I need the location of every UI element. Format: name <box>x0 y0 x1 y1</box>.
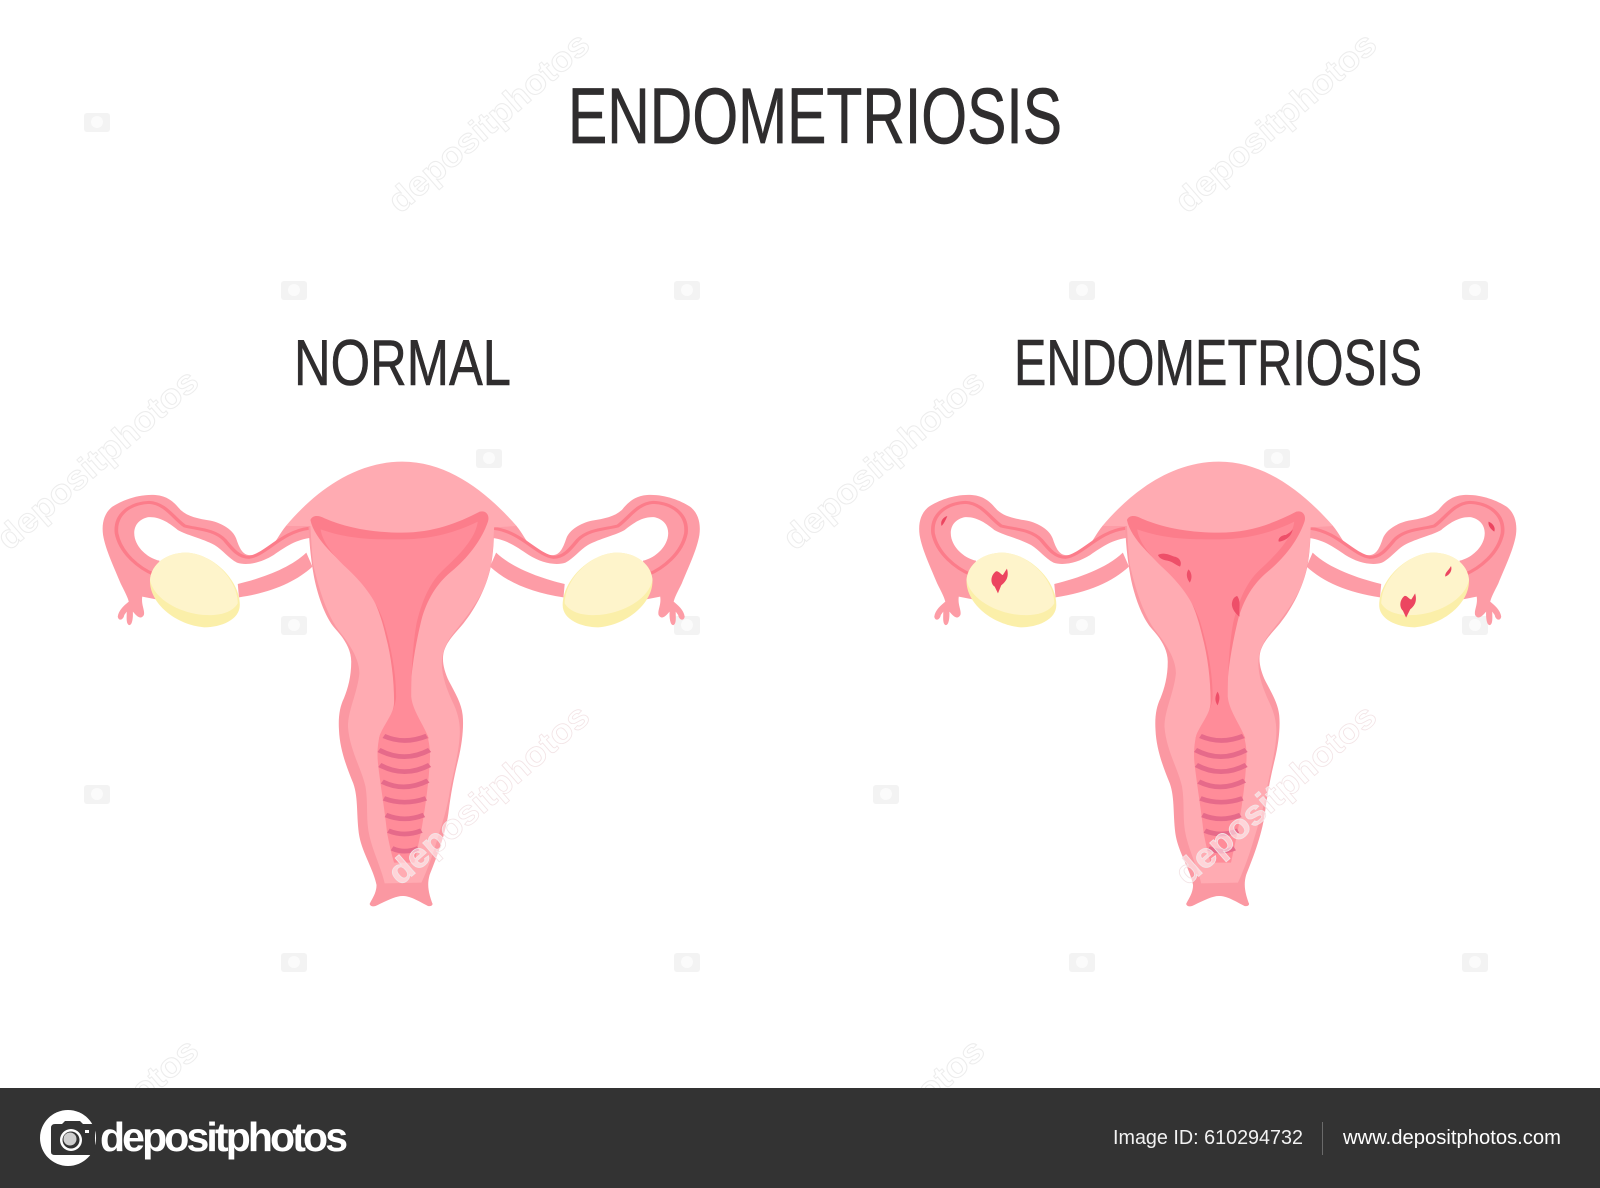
right fallopian tube <box>1307 495 1516 625</box>
watermark layer: over artwork: depositphotos <box>380 697 597 892</box>
right ovary <box>563 553 652 627</box>
left ovary <box>967 553 1056 627</box>
right ovary <box>1379 553 1469 627</box>
vaginal folds <box>379 736 430 851</box>
website url: www.depositphotos.com <box>1342 1127 1561 1149</box>
diagram: endometriosis uterus <box>919 462 1516 906</box>
left ovarian ligament <box>238 553 312 597</box>
heading: normal: NORMAL <box>294 326 511 399</box>
right ovarian ligament <box>1307 553 1381 597</box>
uterus body <box>286 462 517 906</box>
left ovarian ligament <box>1054 553 1129 597</box>
vaginal folds <box>1196 736 1246 851</box>
right fallopian tube <box>490 495 700 625</box>
watermark layer: over artwork <box>380 697 1384 892</box>
diagram: normal uterus <box>103 462 700 906</box>
icon: camera logo <box>40 1110 96 1166</box>
watermark layer: background: depositphotos <box>775 362 992 557</box>
right ovarian ligament <box>490 553 565 597</box>
title: ENDOMETRIOSIS <box>568 71 1062 160</box>
footer bar <box>0 1088 1600 1188</box>
watermark layer: background: depositphotos <box>1167 25 1384 220</box>
left fallopian tube <box>103 495 312 625</box>
heading: endometriosis: ENDOMETRIOSIS <box>1014 326 1422 399</box>
uterus body <box>1102 462 1333 906</box>
watermark layer: over artwork: depositphotos <box>1167 697 1384 892</box>
left ovary <box>150 553 240 627</box>
watermark layer: background: depositphotos <box>380 25 597 220</box>
logo wordmark: depositphotos <box>100 1114 348 1160</box>
image id: Image ID: 610294732 <box>1113 1127 1303 1149</box>
endometrial lesions <box>941 516 1495 705</box>
left fallopian tube <box>919 495 1129 625</box>
